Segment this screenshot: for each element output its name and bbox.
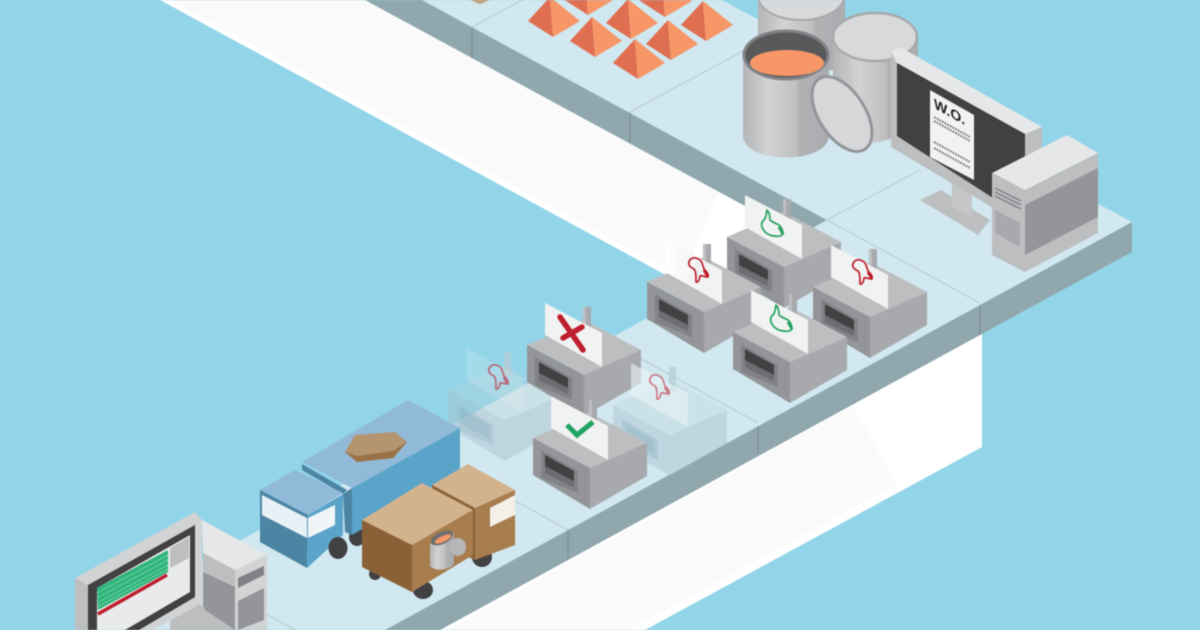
truck rear wheel xyxy=(349,528,365,546)
green data table xyxy=(97,550,168,610)
work order monitor xyxy=(891,47,1042,235)
red alert row xyxy=(98,575,167,614)
grey side panel xyxy=(170,537,189,568)
inspection machine: thumbs up front xyxy=(733,290,847,403)
upper white wall xyxy=(160,0,830,292)
barrel label on box xyxy=(429,527,466,570)
cardboard box carts xyxy=(362,464,515,599)
rear box xyxy=(432,464,515,567)
data monitor xyxy=(75,512,202,630)
truck cab xyxy=(260,470,343,568)
right computer tower xyxy=(992,135,1098,272)
right barrel xyxy=(833,13,918,142)
open barrel with orange material xyxy=(743,31,829,158)
inspection machine: rejected with red cross xyxy=(527,303,641,416)
truck front wheel xyxy=(328,537,348,559)
truck trailer xyxy=(302,400,460,535)
small parcel corner at top edge xyxy=(470,0,490,4)
monitor stand xyxy=(920,178,990,235)
parcel on trailer xyxy=(345,432,407,462)
front box xyxy=(362,483,473,599)
left computer tower xyxy=(170,520,267,630)
inspection machine: thumbs down left xyxy=(647,240,761,353)
back barrel xyxy=(758,0,845,70)
work order document: W.O. xyxy=(934,96,965,129)
work order document xyxy=(930,90,974,180)
lower white wall xyxy=(440,333,982,630)
inspection machine: thumbs up back xyxy=(727,195,841,308)
ghost machine right xyxy=(613,363,727,476)
barrel lid xyxy=(800,66,884,162)
delivery truck xyxy=(260,400,460,568)
inspection machine: approved with green check xyxy=(533,396,647,509)
inspection machine: thumbs down right xyxy=(813,245,927,358)
ghost machine left xyxy=(448,348,562,461)
conveyor side faces xyxy=(365,0,1132,630)
pile of orange pyramids xyxy=(528,0,733,79)
